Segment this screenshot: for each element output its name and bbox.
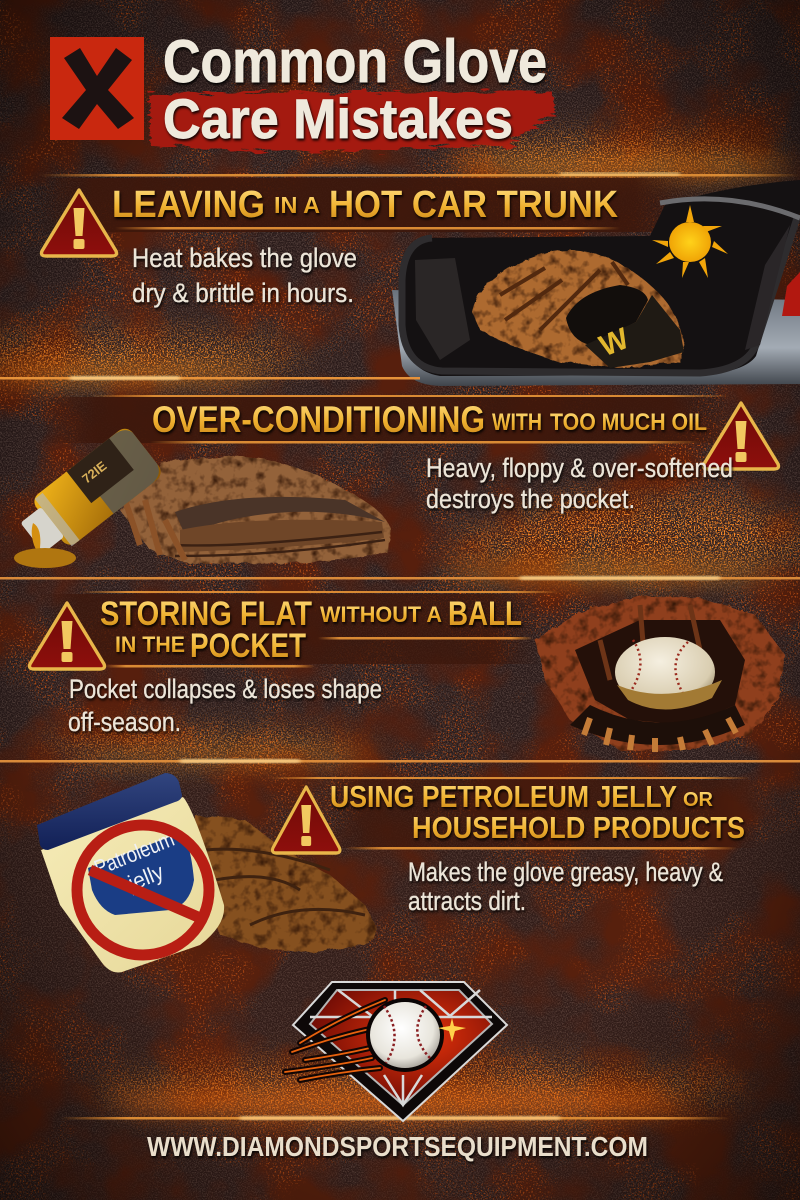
heading: BALL <box>448 595 522 633</box>
icon: prohibition sign <box>77 825 209 955</box>
heading: USING PETROLEUM JELLY <box>330 779 677 814</box>
panel: storing flat <box>30 591 785 752</box>
blue label: jelly <box>124 859 167 896</box>
body text: destroys the pocket. <box>426 484 635 514</box>
heading: OVER-CONDITIONING <box>152 399 485 440</box>
heading band <box>40 594 540 664</box>
heading: HOUSEHOLD PRODUCTS <box>412 810 745 845</box>
body text: dry & brittle in hours. <box>132 278 354 308</box>
icon: warning triangle <box>704 403 778 469</box>
heading band <box>40 397 740 443</box>
icon: warning triangle <box>272 787 340 853</box>
website url: WWW.DIAMONDSPORTSEQUIPMENT.COM <box>147 1131 648 1162</box>
section divider glow 4 <box>0 749 800 763</box>
title block <box>50 28 556 152</box>
baseball <box>615 637 722 710</box>
heading: LEAVING <box>112 184 265 226</box>
blue label <box>88 826 194 915</box>
heading band <box>330 780 760 848</box>
heading: OR <box>683 789 714 811</box>
title text: Care Mistakes <box>163 87 513 150</box>
section divider glow 2 <box>0 364 730 397</box>
illustration: oil bottle <box>13 425 165 568</box>
footer glow <box>60 1086 730 1120</box>
body text: Heat bakes the glove <box>132 243 357 273</box>
illustration: oil bottle: 72IE <box>79 458 110 486</box>
section divider glow 1 <box>40 157 800 179</box>
illustration: leather glove in trunk: W <box>595 322 634 363</box>
heading band <box>40 178 700 232</box>
body text <box>426 453 733 514</box>
red brush stroke <box>150 91 556 152</box>
body text: Heavy, floppy & over-softened <box>426 453 733 483</box>
illustration: petroleum jelly jar <box>37 773 224 972</box>
logo: diamond with baseball <box>285 982 507 1121</box>
speed streaks <box>285 1000 385 1080</box>
baseball <box>366 998 444 1072</box>
icon: warning triangle <box>42 190 116 256</box>
blue label: Patroleum <box>91 826 178 881</box>
body text <box>408 857 723 916</box>
heading <box>330 779 745 845</box>
body text: Pocket collapses & loses shape <box>69 674 382 704</box>
heading: POCKET <box>190 627 306 665</box>
heading: HOT CAR TRUNK <box>329 184 619 226</box>
body text <box>132 243 357 308</box>
section divider glow 3 <box>0 563 800 581</box>
heading: STORING FLAT <box>100 595 312 633</box>
heading: IN A <box>274 192 320 218</box>
panel: over-conditioning <box>13 397 779 568</box>
icon: sun <box>652 205 728 278</box>
heading <box>100 595 522 665</box>
body text: off-season. <box>68 707 181 737</box>
heading: IN THE <box>115 632 185 657</box>
title text: Common Glove <box>163 28 547 95</box>
heading: WITH <box>492 409 542 436</box>
icon: warning triangle <box>30 603 104 669</box>
heading <box>112 184 619 226</box>
body text: attracts dirt. <box>408 886 526 916</box>
icon: red X box <box>50 37 144 140</box>
heading: WITHOUT A <box>320 602 442 627</box>
illustration: glove with oil <box>120 456 390 564</box>
illustration: worn glove <box>195 815 378 952</box>
panel: petroleum jelly <box>37 773 760 972</box>
panel: hot car trunk <box>40 178 800 386</box>
illustration: leather glove in trunk <box>472 250 684 368</box>
illustration: car trunk <box>392 180 800 386</box>
body text <box>68 674 382 737</box>
illustration: glove with baseball <box>535 596 785 752</box>
body text: Makes the glove greasy, heavy & <box>408 857 723 887</box>
heading: TOO MUCH OIL <box>550 409 707 436</box>
sparkle <box>438 1018 466 1042</box>
title text <box>163 28 547 150</box>
